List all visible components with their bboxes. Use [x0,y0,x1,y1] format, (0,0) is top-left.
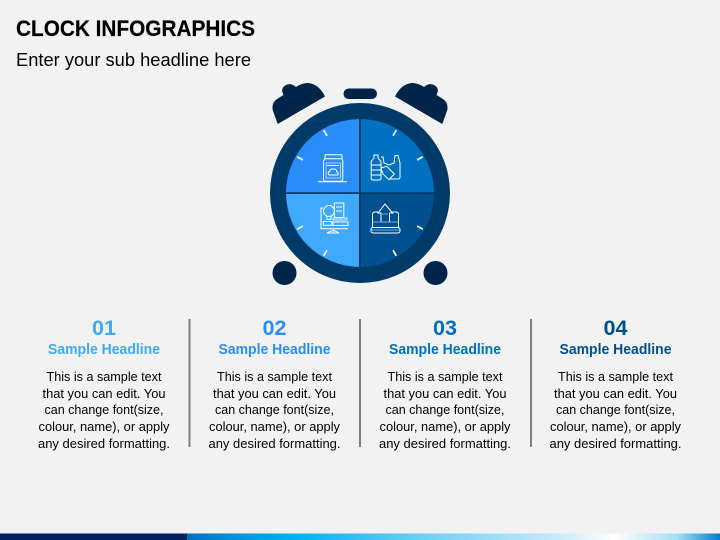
footer bar [0,534,720,540]
column 01 [38,317,170,451]
subtitle: Enter your sub headline here [16,50,251,70]
right bell [395,83,448,124]
quadrant 03 [286,194,359,267]
number 03: 03 [433,317,457,340]
number 02: 02 [262,317,286,340]
body text 01: colour, name), or apply [38,419,170,434]
column 04 [550,317,682,451]
body text 04: can change font(size, [556,402,675,417]
body text 01 [38,369,170,451]
body text 03: colour, name), or apply [380,419,511,434]
body text 04: This is a sample text [558,369,673,384]
left bell [272,83,325,124]
column 03 [379,317,511,451]
headline 04: Sample Headline [560,341,672,358]
body text 02: any desired formatting. [208,436,340,451]
body text 02: colour, name), or apply [209,419,340,434]
headline 03: Sample Headline [389,341,501,358]
column dividers [190,319,531,447]
body text 02: This is a sample text [217,369,332,384]
clock ticks [297,130,423,256]
body text 03: any desired formatting. [379,436,511,451]
body text 04: any desired formatting. [550,436,682,451]
body text 04 [550,369,682,451]
body text 02: can change font(size, [215,402,334,417]
clock ring [270,103,450,283]
icon: bottle and bag [371,155,400,180]
number 04: 04 [604,317,628,340]
icon: light bulb and board [321,203,348,233]
right foot [424,261,448,285]
body text 04: colour, name), or apply [550,419,681,434]
body text 04: that you can edit. You [554,386,677,401]
body text 03: can change font(size, [386,402,504,417]
body text 01: can change font(size, [44,402,164,417]
body text 01: that you can edit. You [42,386,166,401]
icon: laptop with upload arrow [371,204,400,233]
icon: jar [318,155,347,182]
quadrant 04 [361,194,434,267]
top button [344,88,377,99]
left foot [272,261,296,285]
body text 03: that you can edit. You [384,386,506,401]
body text 03 [379,369,511,451]
quadrant 02 [361,119,434,192]
body text 01: any desired formatting. [38,436,170,451]
headline 02: Sample Headline [218,341,330,358]
number 01: 01 [92,317,116,340]
quadrant 01 [286,119,359,192]
body text 03: This is a sample text [388,369,503,384]
body text 02: that you can edit. You [213,386,336,401]
title: CLOCK INFOGRAPHICS [16,16,255,41]
body text 02 [208,369,340,451]
alarm clock [270,83,450,285]
column 02 [208,317,340,451]
headline 01: Sample Headline [48,341,160,358]
body text 01: This is a sample text [46,369,162,384]
